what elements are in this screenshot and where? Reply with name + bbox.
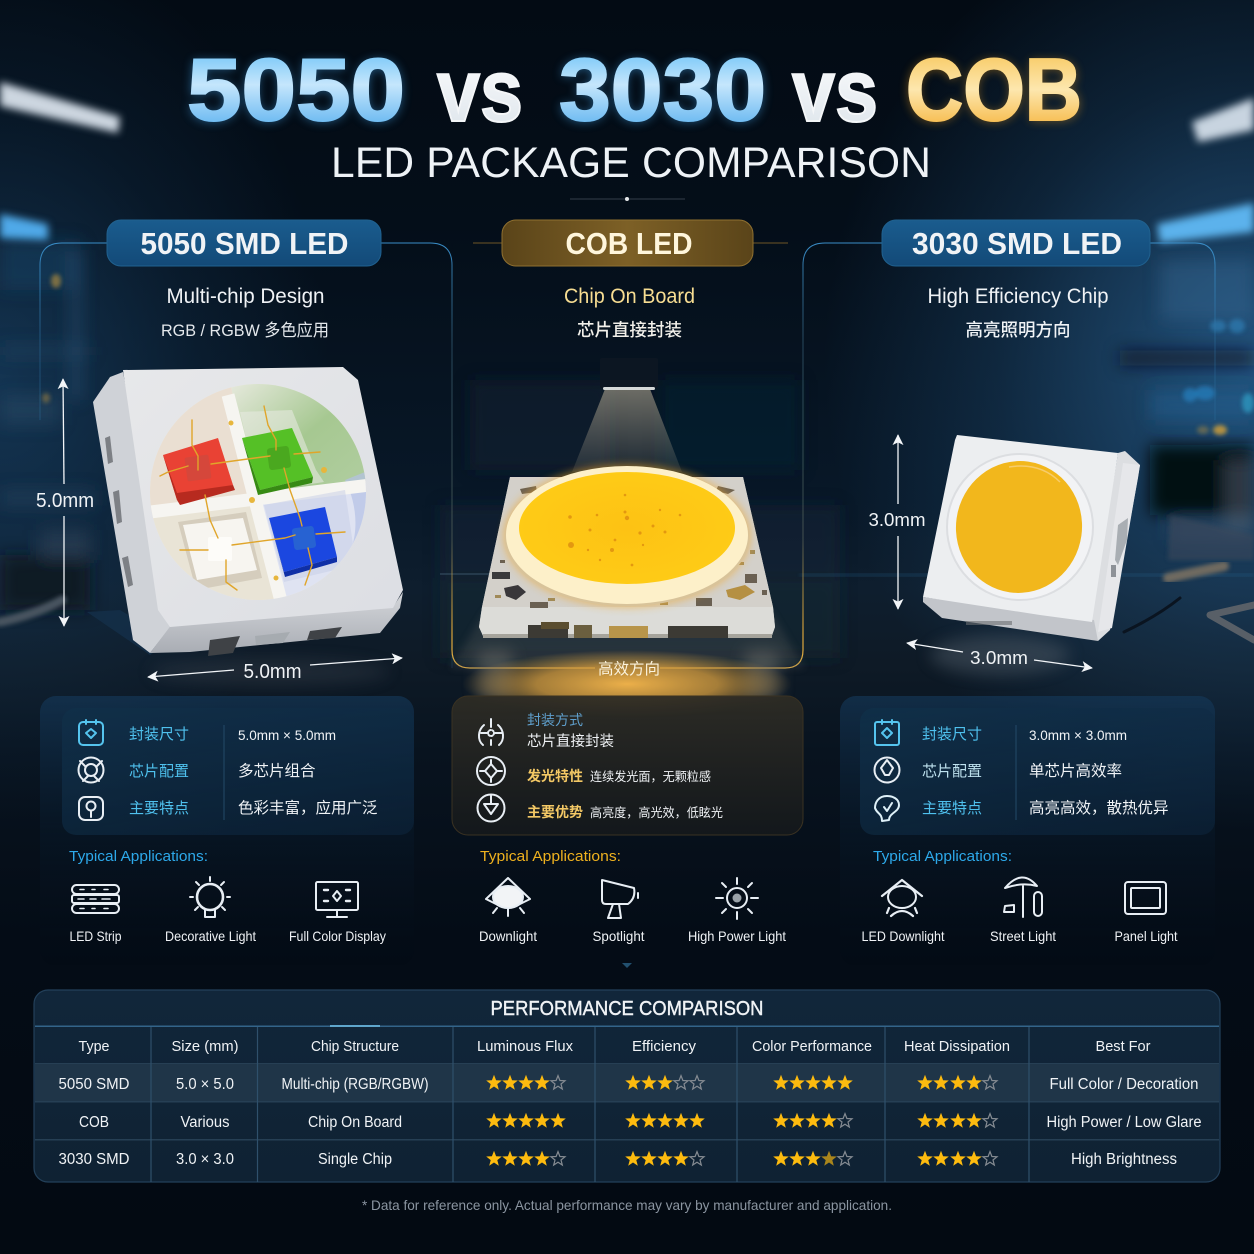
icon: LED strip: [72, 885, 119, 913]
heading: 3030: 高亮照明方向: [966, 320, 1070, 340]
panel outline: COB: [452, 240, 803, 668]
row values: [238, 727, 378, 817]
panel: 5050 specs: [40, 696, 414, 966]
panel: 3030 specs: [840, 696, 1215, 966]
heading: COB: [564, 285, 695, 340]
title: 5050 vs 3030 vs COB: 3030: [559, 40, 766, 139]
label: COB divider text: 高效方向: [598, 660, 660, 678]
header row: Best For: [1096, 1038, 1150, 1055]
row values: 单芯片高效率: [1029, 762, 1122, 780]
row values: 高亮高效，散热优异: [1029, 799, 1169, 817]
row values: 色彩丰富，应用广泛: [238, 798, 378, 817]
heading: 3030: [928, 285, 1108, 340]
header row: Size (mm): [172, 1038, 239, 1055]
icon: LED downlight: [882, 880, 922, 916]
row values: [1029, 727, 1169, 817]
title: 5050 vs 3030 vs COB: COB: [905, 41, 1083, 140]
COB top accent lines: [473, 242, 788, 244]
label: Street Light: Street Light: [990, 928, 1056, 944]
row: 3030 SMD: 3.0 × 3.0: [176, 1151, 234, 1168]
icon: downlight: [486, 878, 530, 916]
label: High Power Light: High Power Light: [688, 928, 786, 944]
panel outline: 3030: [803, 243, 1215, 650]
row: 5050 SMD: Full Color / Decoration: [1050, 1076, 1198, 1093]
icon: street light: [1004, 877, 1042, 917]
row labels: 芯片配置: [922, 763, 982, 780]
row: 5050 SMD: [58, 1075, 1198, 1093]
header row: Color Performance: [752, 1038, 872, 1055]
header row: Luminous Flux: [477, 1038, 573, 1055]
heading: typical applications: Typical Applications:: [69, 849, 208, 865]
icon: spotlight: [602, 880, 638, 918]
floor: [800, 574, 1254, 576]
header row: Heat Dissipation: [904, 1038, 1010, 1055]
badge: 5050 SMD LED: [107, 220, 381, 266]
row labels: 芯片配置: [129, 763, 189, 780]
title: 5050 vs 3030 vs COB: vs: [437, 41, 523, 140]
subtitle: LED PACKAGE COMPARISON: [331, 140, 931, 187]
title: 5050 vs 3030 vs COB: vs: [792, 41, 878, 140]
performance comparison table: [34, 990, 1220, 1182]
panel: COB specs: [452, 696, 803, 944]
title: 5050 vs 3030 vs COB: 5050: [186, 41, 406, 140]
label: LED Strip: LED Strip: [70, 928, 122, 944]
icon: decorative light: [190, 877, 230, 917]
badge: COB LED: COB LED: [566, 226, 692, 261]
row labels: 主要特点: [129, 800, 189, 817]
heading: COB: 芯片直接封装: [577, 320, 682, 340]
label: Downlight: Downlight: [479, 928, 537, 944]
row values: 5.0mm × 5.0mm: [238, 727, 336, 743]
label: Full Color Display: Full Color Display: [289, 928, 386, 944]
small divider marker: [622, 963, 632, 968]
row labels: 封装尺寸: [922, 726, 982, 743]
label: LED Downlight: LED Downlight: [862, 928, 945, 944]
header row: Chip Structure: [311, 1038, 399, 1055]
icon: packaging: [479, 719, 503, 745]
row: 3030 SMD: [58, 1151, 1177, 1168]
row: 3030 SMD: Single Chip: [318, 1151, 392, 1168]
heading: COB: Chip On Board: [564, 285, 695, 308]
header row: Efficiency: [632, 1038, 696, 1055]
icon: key features: [79, 797, 103, 820]
dimension: 3030 width: 3.0mm: [970, 647, 1028, 668]
heading: 5050: [161, 285, 329, 340]
fluorescent lights: [0, 82, 1254, 243]
dimension: 3030 height: 3.0mm: [868, 509, 926, 530]
label: Decorative Light: Decorative Light: [165, 928, 256, 944]
glow below COB chip: [462, 650, 792, 718]
icon: key features: [875, 796, 899, 821]
label: Spotlight: Spotlight: [592, 928, 645, 944]
badge: 3030 SMD LED: 3030 SMD LED: [912, 226, 1122, 261]
badge: COB LED: [502, 220, 753, 266]
panel outline: 5050: [40, 243, 452, 668]
footnote: * Data for reference only. Actual performance may vary by manufacturer and application.: [362, 1197, 892, 1213]
icon: high power light: [716, 878, 758, 919]
heading: typical applications: Typical Applications:: [873, 849, 1012, 865]
label: Panel Light: Panel Light: [1114, 928, 1178, 944]
row text: [527, 712, 723, 820]
row: 5050 SMD: Multi-chip (RGB/RGBW): [282, 1076, 428, 1093]
icon: package size: [79, 720, 103, 745]
chip: 5050 RGBW LED: [87, 367, 403, 686]
row values: 多芯片组合: [238, 762, 316, 780]
chip: COB LED with spotlight: [450, 358, 805, 668]
heading: typical applications: Typical Applications:: [480, 849, 621, 865]
title: 5050 vs 3030 vs COB: 3030: [558, 41, 767, 140]
row text: 封装方式: [527, 712, 583, 728]
icon: chip configuration: [78, 758, 104, 782]
dimension: 5050 width: [148, 658, 402, 683]
heading: 3030: High Efficiency Chip: [928, 285, 1108, 308]
row labels: [922, 726, 982, 817]
row: COB: High Power / Low Glare: [1046, 1114, 1202, 1131]
row: COB: Chip On Board: [308, 1114, 402, 1131]
icon: emission: [477, 757, 505, 785]
header row: [78, 1038, 1150, 1055]
row labels: [129, 726, 189, 817]
row: 5050 SMD: 5050 SMD: [58, 1076, 130, 1093]
row: COB: COB: [79, 1114, 109, 1131]
row text: 连续发光面，无颗粒感: [590, 769, 711, 784]
dimension: 5050 height: 5.0mm: [36, 490, 94, 512]
row: COB: [79, 1113, 1202, 1131]
chip: 3030 LED: [923, 435, 1140, 675]
row text: 发光特性: [527, 768, 583, 784]
title: 5050 vs 3030 vs COB: COB: [906, 40, 1082, 139]
row values: 3.0mm × 3.0mm: [1029, 727, 1127, 743]
row: 3030 SMD: High Brightness: [1071, 1151, 1177, 1168]
dimension: 3030 width: [907, 643, 1092, 668]
row: 3030 SMD: 3030 SMD: [58, 1151, 130, 1168]
table title: PERFORMANCE COMPARISON: [490, 998, 764, 1020]
row labels: 主要特点: [922, 800, 982, 817]
heading: 5050: Multi-chip Design: [166, 285, 324, 308]
icon: package size: [875, 720, 899, 745]
row text: 芯片直接封装: [527, 733, 614, 750]
row labels: 封装尺寸: [129, 726, 189, 743]
icon: advantage: [478, 794, 504, 822]
icon: full color display: [316, 882, 358, 917]
badge: 5050 SMD LED: 5050 SMD LED: [140, 226, 348, 261]
cables and tools: [0, 566, 1254, 640]
header row: Type: [78, 1038, 110, 1055]
row: 5050 SMD: 5.0 × 5.0: [176, 1076, 234, 1093]
heading: 5050: RGB / RGBW 多色应用: [161, 321, 329, 340]
dimension: 5050 width: 5.0mm: [244, 661, 302, 683]
icon: panel light: [1125, 882, 1166, 914]
badge: 3030 SMD LED: [882, 220, 1150, 266]
row: COB: Various: [180, 1114, 230, 1131]
icon: chip configuration: [874, 758, 900, 782]
title divider: [570, 197, 685, 201]
title: 5050 vs 3030 vs COB: 5050: [187, 40, 405, 139]
row text: 高亮度，高光效，低眩光: [590, 805, 723, 820]
title: 5050 vs 3030 vs COB: [186, 40, 1083, 140]
row text: 主要优势: [527, 804, 583, 820]
